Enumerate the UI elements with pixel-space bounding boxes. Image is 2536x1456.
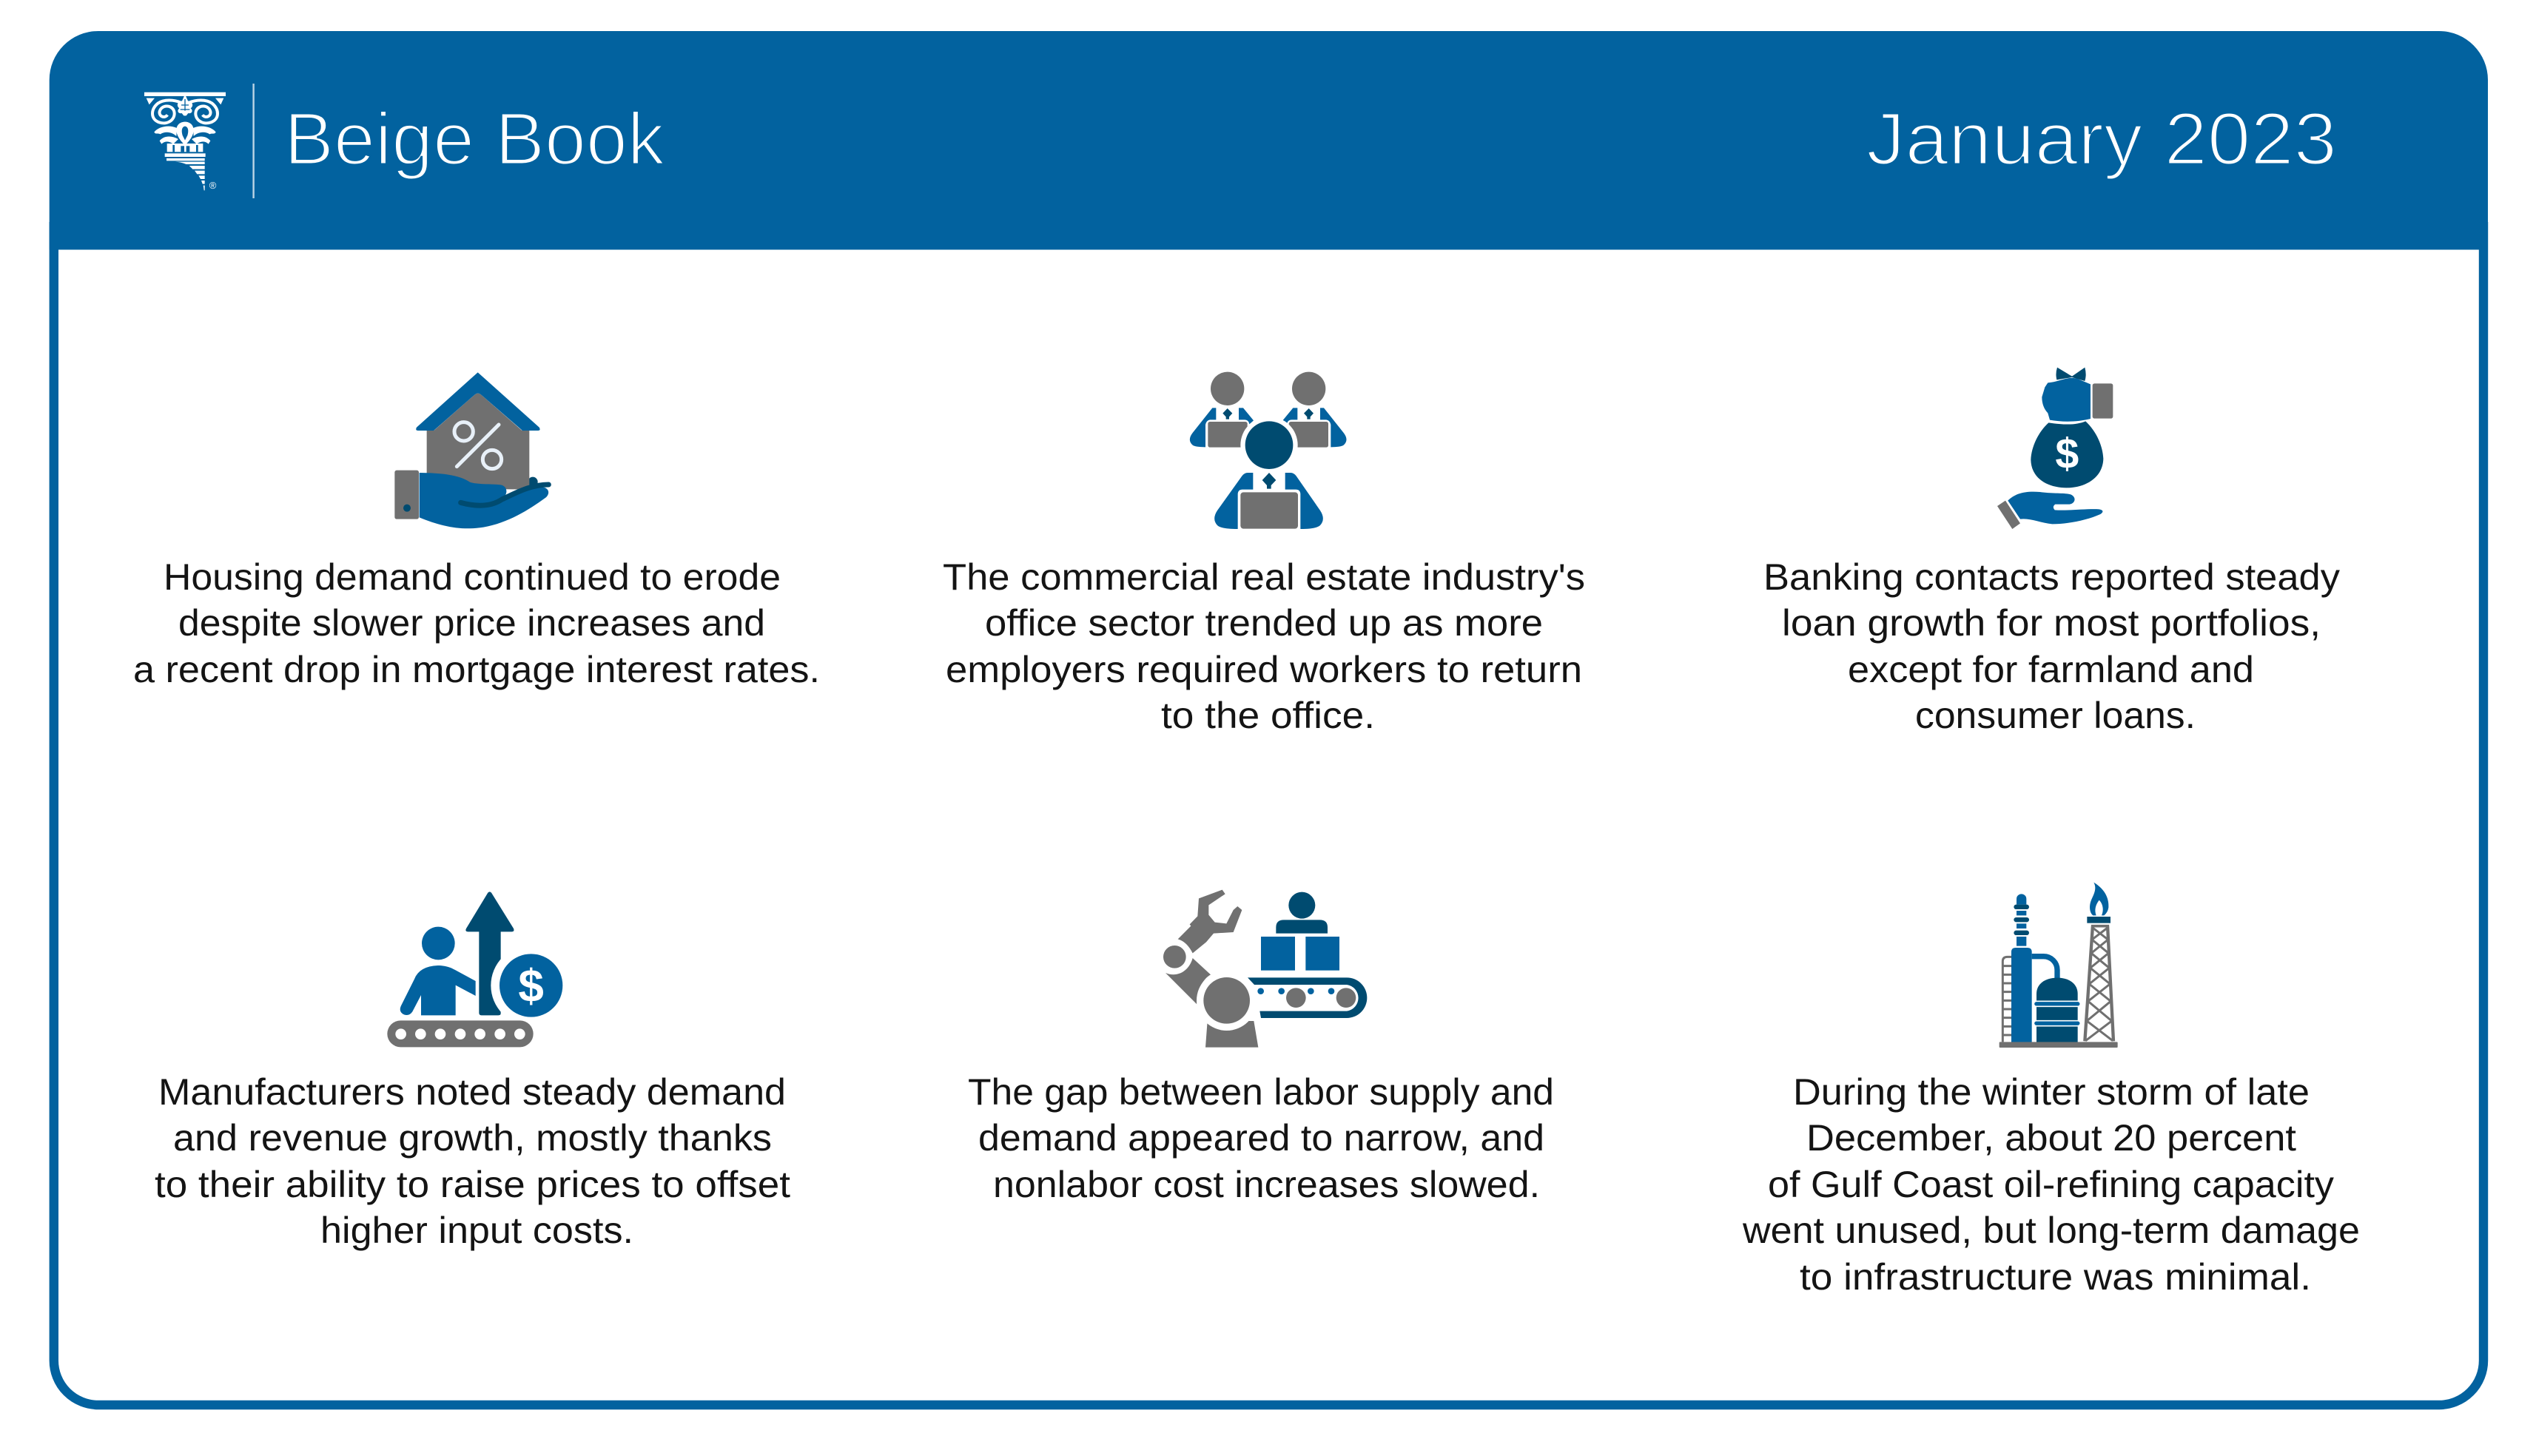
icon: robot arm and conveyor	[1163, 890, 1367, 1048]
text: energy	[1742, 1071, 2360, 1298]
text: commercial real estate: The commercial real estate industry's	[943, 556, 1585, 598]
text: commercial real estate: employers required workers to return	[946, 649, 1582, 690]
text: energy: to infrastructure was minimal.	[1800, 1256, 2311, 1298]
icon: manufacturer worker with rising price arrow	[387, 892, 571, 1047]
text: labor market: demand appeared to narrow, and	[978, 1117, 1544, 1159]
text: banking: Banking contacts reported steady	[1763, 556, 2340, 598]
text: energy: went unused, but long-term damage	[1742, 1210, 2360, 1251]
text: housing: despite slower price increases and	[178, 602, 765, 644]
text: energy: December, about 20 percent	[1806, 1117, 2296, 1159]
icon: Federal Reserve column logo	[144, 92, 226, 190]
text: banking: loan growth for most portfolios,	[1782, 602, 2321, 644]
icon: money bag between hands: $	[2055, 431, 2079, 478]
text: manufacturing: to their ability to raise prices to offset	[155, 1164, 790, 1205]
icon: manufacturer worker with rising price arrow: $	[518, 961, 544, 1012]
divider	[252, 84, 255, 198]
text: manufacturing: and revenue growth, mostly thanks	[173, 1117, 772, 1159]
date: January 2023	[1866, 98, 2337, 181]
text: labor market: The gap between labor supply and	[968, 1071, 1554, 1113]
text: labor market	[968, 1071, 1554, 1205]
text: labor market: nonlabor cost increases slowed.	[993, 1164, 1540, 1205]
text: banking: except for farmland and	[1848, 649, 2254, 690]
icon: money bag between hands	[1997, 368, 2113, 529]
icon: registered mark: ®	[209, 180, 217, 191]
icon: oil refinery	[1999, 883, 2118, 1048]
text: commercial real estate: office sector trended up as more	[985, 602, 1543, 644]
panel: header band	[50, 31, 2488, 250]
text: housing: Housing demand continued to erode	[164, 556, 781, 598]
text: commercial real estate	[943, 556, 1585, 736]
icon: office workers at laptops	[1190, 372, 1346, 529]
text: banking: consumer loans.	[1915, 695, 2196, 736]
panel: card outline	[54, 222, 2483, 1405]
text: housing: a recent drop in mortgage interest rates.	[133, 649, 820, 690]
text: housing	[133, 556, 820, 690]
text: energy: During the winter storm of late	[1793, 1071, 2310, 1113]
title: Beige Book	[284, 98, 665, 181]
text: manufacturing: Manufacturers noted steady demand	[158, 1071, 786, 1113]
text: manufacturing	[155, 1071, 790, 1251]
text: energy: of Gulf Coast oil-refining capacity	[1768, 1164, 2334, 1205]
text: banking	[1763, 556, 2340, 736]
text: manufacturing: higher input costs.	[320, 1210, 633, 1251]
text: commercial real estate: to the office.	[1161, 695, 1375, 736]
icon: house on hand	[394, 372, 548, 528]
